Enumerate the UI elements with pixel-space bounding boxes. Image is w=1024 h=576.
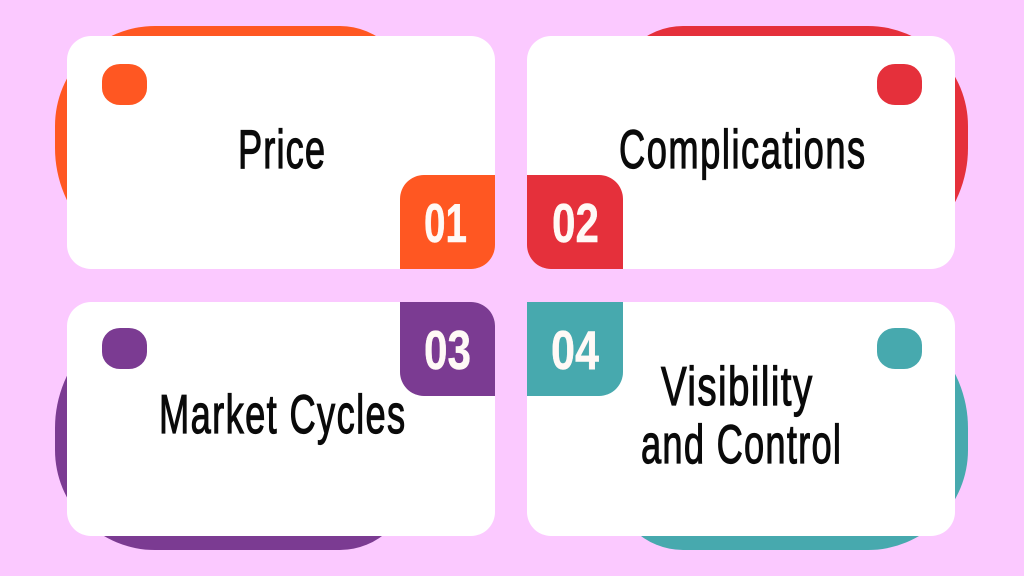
number badge: 03: 03 — [424, 319, 471, 381]
heading: Visibility and Control: and Control — [641, 413, 841, 475]
number badge: 02: 02 — [552, 192, 599, 254]
number badge: 04: 04 — [551, 319, 599, 381]
backing shape: red — [613, 26, 968, 268]
number badge: 02 — [527, 175, 623, 269]
heading: Visibility and Control — [641, 356, 841, 475]
icon: purple dot — [102, 328, 147, 369]
icon: red dot — [877, 64, 922, 105]
icon: orange dot — [102, 64, 147, 105]
number badge: 04 — [527, 302, 623, 396]
panel: 02 Complications — [527, 26, 968, 269]
number badge: 01: 01 — [424, 192, 467, 254]
card: Visibility and Control — [527, 302, 955, 536]
number badge: 01 — [400, 175, 495, 269]
backing shape: teal — [613, 308, 968, 550]
card: Price — [67, 36, 495, 269]
backing shape: orange — [55, 26, 410, 268]
heading: Price: Price — [238, 118, 325, 180]
card: Market Cycles — [67, 302, 495, 536]
heading: Complications: Complications — [619, 118, 865, 180]
card: Complications — [527, 36, 955, 269]
panel: 03 Market Cycles — [55, 302, 495, 550]
heading: Market Cycles: Market Cycles — [159, 383, 405, 445]
backing shape: purple — [55, 308, 410, 550]
heading: Visibility and Control: Visibility — [661, 356, 812, 418]
panel: 04 Visibility and Control — [527, 302, 968, 550]
panel: 01 Price — [55, 26, 495, 269]
number badge: 03 — [400, 302, 495, 396]
icon: teal dot — [877, 328, 922, 369]
